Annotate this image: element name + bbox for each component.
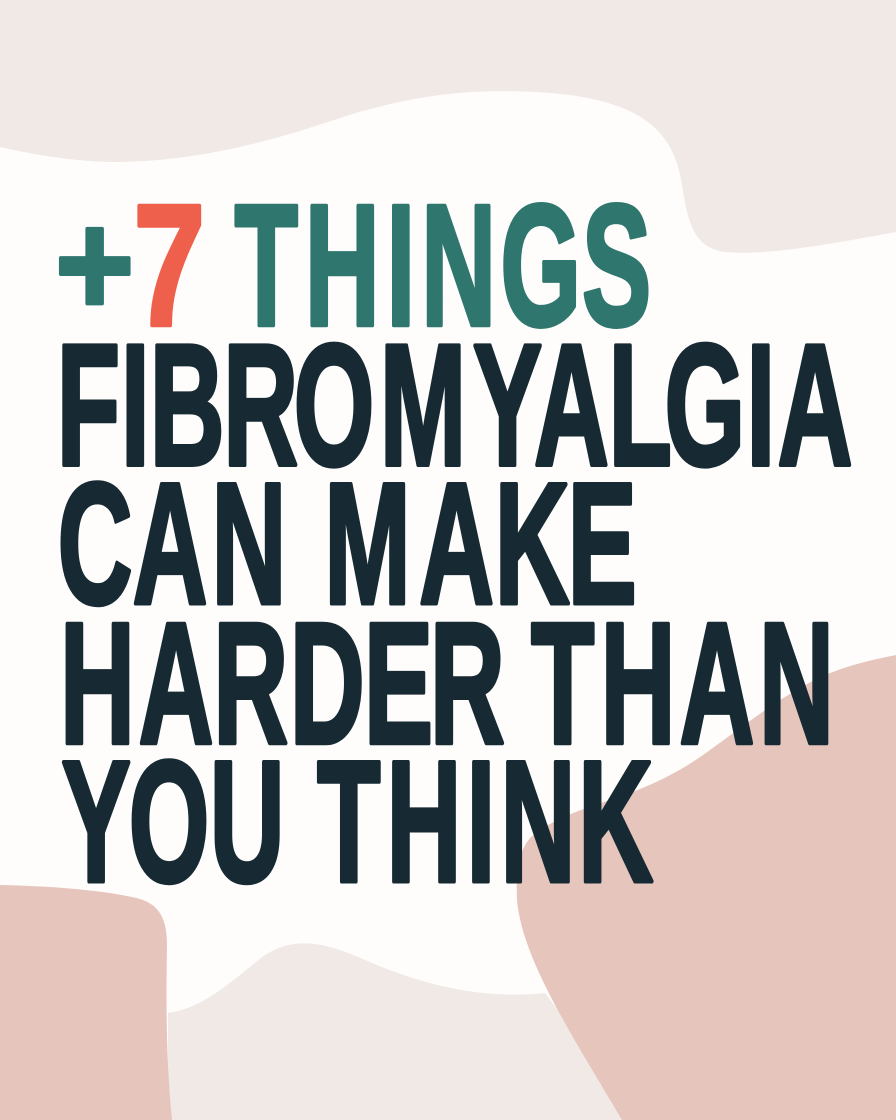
background: lower right pink shape bbox=[517, 655, 896, 1120]
title line 1: +7 THINGS bbox=[55, 170, 651, 363]
number 7: 7 bbox=[134, 170, 205, 362]
word THINGS: THINGS bbox=[235, 170, 651, 363]
background: top blush shape bbox=[0, 0, 896, 253]
background: lower left pink shape bbox=[0, 885, 172, 1120]
title bbox=[55, 170, 853, 919]
title line 4: HARDER THAN bbox=[60, 588, 834, 781]
title line 5: YOU THINK bbox=[62, 726, 653, 919]
title line 3: CAN MAKE bbox=[58, 448, 637, 641]
plus sign: + bbox=[55, 182, 134, 346]
title line 2: FIBROMYALGIA bbox=[57, 309, 853, 502]
background: bottom blush shape bbox=[168, 943, 640, 1120]
